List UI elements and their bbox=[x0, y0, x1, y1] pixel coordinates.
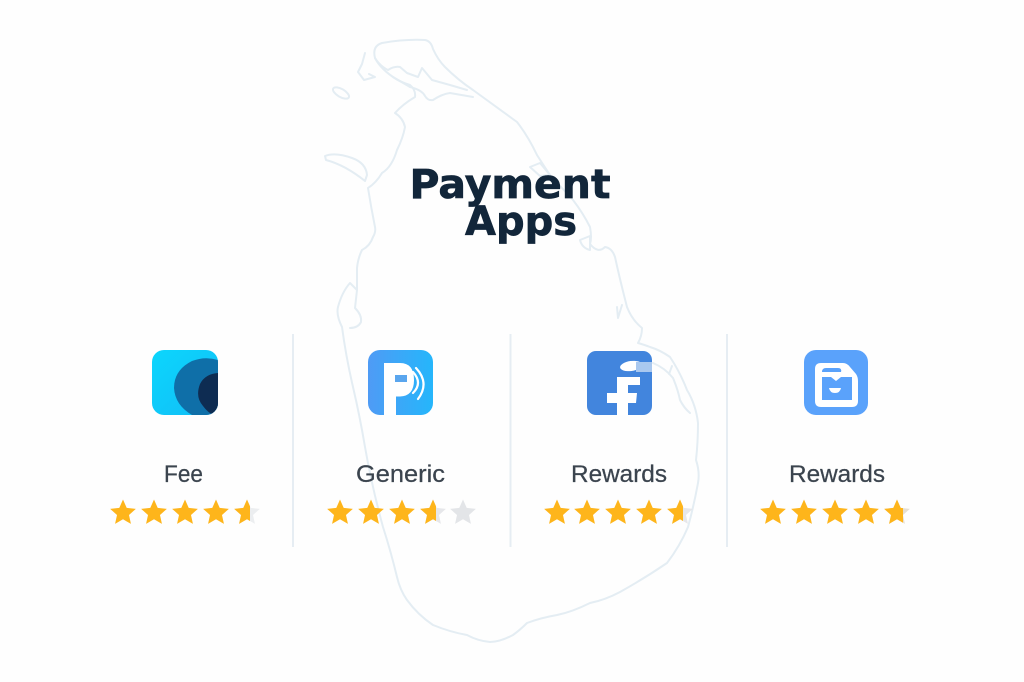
dividers bbox=[293, 334, 727, 547]
label: Fee: Fee bbox=[164, 461, 203, 488]
map outline: Sri Lanka bbox=[325, 40, 699, 642]
icon: app 2 logo bbox=[368, 350, 433, 415]
panel: app 2 Generic bbox=[327, 350, 476, 524]
rating stars: Rewards bbox=[544, 500, 693, 524]
icon: app 1 logo bbox=[152, 350, 218, 415]
title: Payment bbox=[410, 162, 610, 208]
rating stars: Rewards bbox=[760, 500, 910, 524]
label: Generic: Generic bbox=[356, 461, 445, 488]
panel: app 4 Rewards bbox=[760, 350, 910, 524]
label: Rewards: Rewards bbox=[571, 461, 667, 488]
label: Rewards: Rewards bbox=[789, 461, 885, 488]
title bbox=[410, 162, 610, 245]
rating stars: Generic bbox=[327, 500, 476, 524]
title: Apps bbox=[465, 199, 577, 245]
rating stars: Fee bbox=[110, 500, 260, 524]
panel: app 3 Rewards bbox=[544, 351, 693, 524]
panel: app 1 Fee bbox=[110, 350, 260, 524]
icon: app 3 logo bbox=[587, 351, 652, 415]
icon: app 4 logo bbox=[804, 350, 868, 415]
